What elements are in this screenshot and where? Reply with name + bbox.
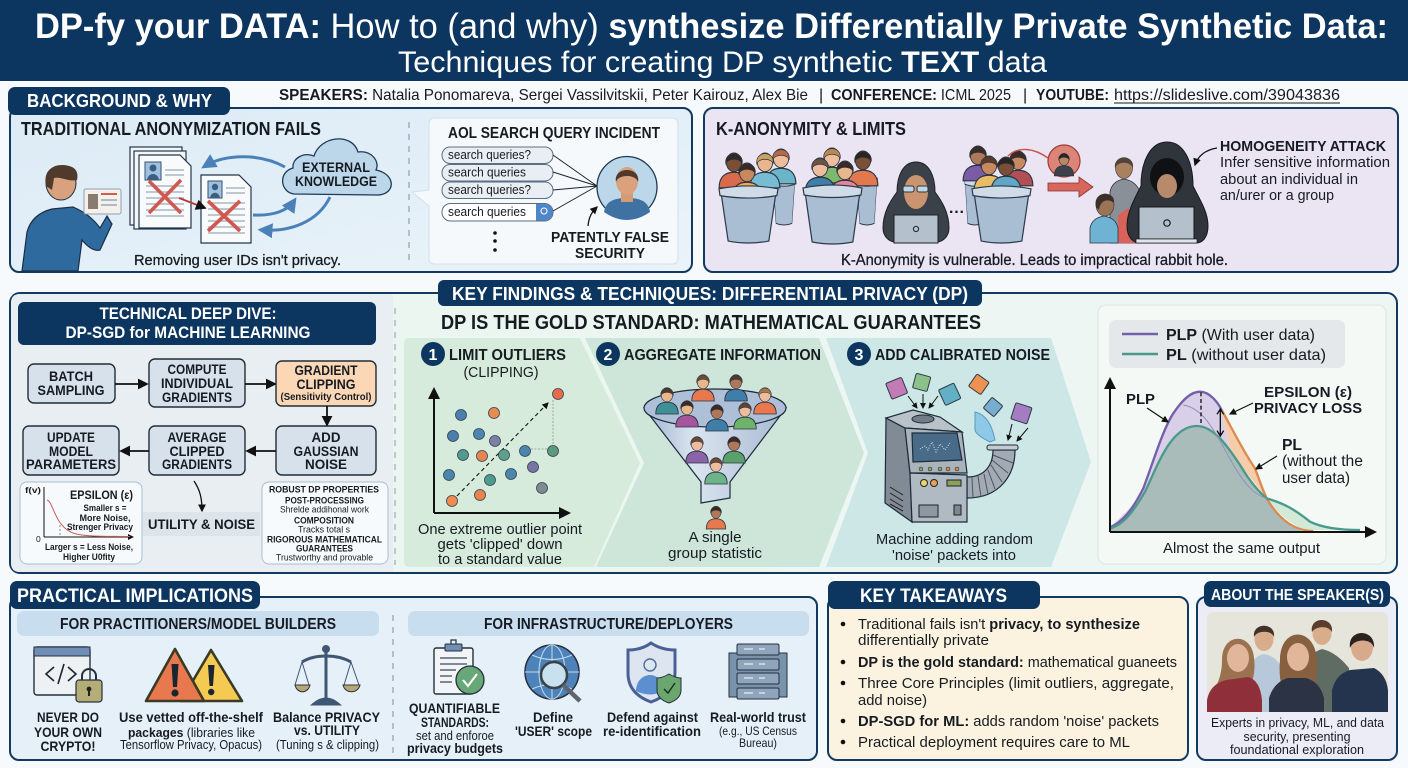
speakers line: | <box>819 87 823 104</box>
flow: compute individual gradients: GRADIENTS <box>162 390 232 405</box>
flow: gradient clipping: (Sensitivity Control) <box>280 392 372 403</box>
caption: experts: Experts in privacy, ML, and data <box>1211 715 1385 730</box>
heading: aggregate: AGGREGATE INFORMATION <box>624 347 821 364</box>
card: robust DP properties: Trustworthy and provable <box>276 552 373 562</box>
label: epsilon privacy loss: PRIVACY LOSS <box>1254 400 1362 417</box>
card: robust DP properties: Shrelde addihonal work <box>280 504 369 514</box>
chart card: PLP vs PL <box>1098 305 1386 564</box>
icon: balance scales <box>295 646 360 704</box>
heading: k-anonymity: K-ANONYMITY & LIMITS <box>716 119 906 139</box>
icon: second anonymized document <box>201 175 251 243</box>
heading: DP-SGD <box>18 302 376 345</box>
title banner: DP-fy your DATA: How to (and why) synthesize Differentially Private Synthetic Data: <box>35 7 1388 46</box>
speaker 3 <box>1269 634 1324 712</box>
search query pills: search queries? <box>448 148 531 162</box>
icon: hacker with glasses <box>883 162 949 243</box>
flow: average clipped gradients <box>149 426 245 475</box>
icon: code window with lock <box>34 647 102 702</box>
icon: noise packets <box>886 373 1032 424</box>
speaker 2 <box>1251 626 1282 712</box>
flow: average clipped gradients: AVERAGE <box>168 430 226 445</box>
arrow: to avatar <box>588 207 597 226</box>
caption: outlier clipped <box>418 521 583 568</box>
speaker 1 <box>1207 639 1262 712</box>
panel: practical implications <box>10 581 817 760</box>
arrow: link between records <box>179 198 205 208</box>
label: patently false security: PATENTLY FALSE <box>551 230 669 246</box>
label: PL <box>1282 437 1363 487</box>
caption: machine adding noise <box>876 531 1033 564</box>
text: quantifiable standards: set and enforoe <box>416 729 494 743</box>
arrow: cloud back to document <box>262 197 330 230</box>
caption: single group statistic: A single <box>688 529 742 546</box>
flow: update model parameters: UPDATE <box>47 430 95 445</box>
chevron 2: aggregate information <box>585 338 864 567</box>
badge 2 <box>596 342 620 366</box>
heading: add calibrated noise: ADD CALIBRATED NOISE <box>875 347 1050 364</box>
density curves <box>1110 392 1360 532</box>
badge 1: 1 <box>429 347 438 364</box>
caption: almost the same output: Almost the same output <box>1163 541 1320 557</box>
subheader: practitioners: FOR PRACTITIONERS/MODEL BUILDERS <box>60 616 336 633</box>
takeaways list: DP is the gold standard: mathematical guaneets <box>858 654 1177 671</box>
flow: gradient clipping <box>276 361 376 406</box>
card: epsilon chart: More Noise, <box>80 513 130 523</box>
search query pills: search queries <box>448 205 526 219</box>
card: robust DP properties: GUARANTEES <box>296 544 353 554</box>
text: real-world trust: (e.g., US Census <box>719 724 797 738</box>
text: never do your own crypto: NEVER DO <box>37 709 99 725</box>
flow: average clipped gradients: GRADIENTS <box>162 457 232 472</box>
text: real-world trust <box>710 709 806 750</box>
tab: about the speakers: ABOUT THE SPEAKER(S) <box>1211 587 1384 604</box>
heading: limit outliers: LIMIT OUTLIERS <box>449 347 566 364</box>
icon: funnel of people <box>644 375 786 503</box>
subheader: infrastructure <box>408 611 809 636</box>
speaker 4 <box>1308 620 1349 712</box>
label: epsilon privacy loss <box>1254 384 1362 417</box>
card: robust DP properties <box>262 482 388 564</box>
flow: gradient clipping: GRADIENT <box>294 363 358 378</box>
tab: about the speakers <box>1204 581 1390 607</box>
heading: DP-SGD: TECHNICAL DEEP DIVE: <box>100 305 276 323</box>
flow: add gaussian noise: GAUSSIAN <box>294 444 358 459</box>
text: real-world trust: Bureau) <box>739 736 777 750</box>
takeaways list: Practical deployment requires care to ML <box>858 734 1130 751</box>
title banner: Techniques for creating DP synthetic TEXT data <box>398 46 1047 79</box>
legend <box>1109 320 1345 368</box>
icon: bucket group one <box>719 149 796 243</box>
text: quantifiable standards: privacy budgets <box>407 741 503 756</box>
caption: single group statistic <box>668 529 763 562</box>
legend: PLP (With user data) <box>1166 327 1315 344</box>
card: robust DP properties: POST-PROCESSING <box>285 496 364 506</box>
heading: DP is the gold standard: DP IS THE GOLD STANDARD: MATHEMATICAL GUARANTEES <box>441 312 981 334</box>
caption: outlier clipped: to a standard value <box>438 551 562 568</box>
caption: experts: foundational exploration <box>1230 742 1364 757</box>
icon: noise machine <box>885 410 1018 522</box>
card: epsilon chart: Strenger Privacy <box>67 522 133 532</box>
title banner <box>0 0 1408 81</box>
card: epsilon chart: Smaller s = <box>84 503 126 513</box>
takeaways list: DP-SGD for ML: adds random 'noise' packets <box>858 713 1159 730</box>
badge 1 <box>421 342 445 366</box>
flow: add gaussian noise: NOISE <box>305 457 347 472</box>
card: robust DP properties: Tracks total s <box>298 524 350 534</box>
text: vetted packages <box>119 709 263 752</box>
icon: bucket group three <box>963 146 1033 243</box>
arrow: cloud to documents <box>205 157 285 167</box>
icon: group targeted by hacker <box>1090 158 1140 243</box>
label: epsilon privacy loss: EPSILON (ε) <box>1264 384 1352 401</box>
flow: batch sampling: BATCH <box>49 369 93 384</box>
text: never do your own crypto: YOUR OWN <box>34 724 102 740</box>
label: PL: PL <box>1282 437 1302 454</box>
text: vetted packages: Use vetted off-the-shelf <box>119 709 263 725</box>
axes <box>1110 379 1375 532</box>
card: robust DP properties: ROBUST DP PROPERTIES <box>269 484 379 496</box>
arrow: PLP <box>1147 408 1168 422</box>
search query pills: search queries <box>448 166 526 180</box>
chevron 1: limit outliers <box>404 338 640 568</box>
photo: five speakers <box>1207 612 1388 712</box>
flow: update model parameters <box>23 426 119 475</box>
label: PL: (without the <box>1282 453 1363 470</box>
arrow: epsilon <box>1230 403 1253 414</box>
icon: external knowledge cloud: KNOWLEDGE <box>295 174 377 189</box>
label: utility and noise <box>143 512 260 536</box>
icon: globe and magnifier <box>525 645 580 701</box>
arrow: document to cloud <box>253 201 294 215</box>
text: define user scope <box>515 709 592 739</box>
text: balance privacy vs utility: vs. UTILITY <box>294 722 361 738</box>
icon: external knowledge cloud <box>283 139 391 195</box>
panel: key takeaways <box>828 581 1188 760</box>
tab: background and why: BACKGROUND & WHY <box>27 91 212 111</box>
icon: server rack <box>729 644 787 699</box>
arrow: to utility and noise <box>194 481 202 511</box>
dots <box>493 231 497 252</box>
flow: update model parameters: MODEL <box>49 444 93 459</box>
dots: ... <box>949 200 964 217</box>
flow: compute individual gradients: INDIVIDUAL <box>161 376 233 391</box>
speakers line: YOUTUBE: <box>1036 87 1109 104</box>
takeaways list: Traditional fails isn't privacy, to synthesize <box>858 616 1140 633</box>
takeaways list: Three Core Principles (limit outliers, aggregate, <box>858 675 1174 692</box>
caption: removing user IDs: Removing user IDs isn't privacy. <box>134 252 341 269</box>
packet arrows <box>908 394 1028 441</box>
scatter plot <box>434 388 569 513</box>
panel: traditional anonymization <box>10 108 692 272</box>
homogeneity attack text: about an individual in <box>1220 172 1358 188</box>
heading: traditional anonymization fails: TRADITIONAL ANONYMIZATION FAILS <box>21 119 321 139</box>
homogeneity attack text: an/urer or a group <box>1220 188 1334 204</box>
caption: machine adding noise: 'noise' packets into <box>892 547 1016 564</box>
flow: batch sampling <box>28 364 115 403</box>
card: epsilon chart: 0 <box>36 534 41 544</box>
text: quantifiable standards: STANDARDS: <box>421 715 489 730</box>
icon: identified person <box>1048 145 1080 177</box>
caption: outlier clipped: gets 'clipped' down <box>438 536 562 553</box>
panel: k-anonymity and limits <box>704 108 1398 272</box>
heading: DP-SGD: DP-SGD for MACHINE LEARNING <box>66 324 310 342</box>
tab: key takeaways <box>828 581 1040 609</box>
icon: person holding ID <box>22 165 121 271</box>
card: epsilon chart <box>20 482 142 564</box>
flow: compute individual gradients <box>149 359 245 407</box>
badge 2: 2 <box>604 347 613 364</box>
text: quantifiable standards: QUANTIFIABLE <box>409 701 500 716</box>
takeaways list: differentially private <box>858 632 989 649</box>
caption: outlier clipped: One extreme outlier point <box>418 521 583 538</box>
icon: user avatar <box>597 156 657 220</box>
flow: add gaussian noise: ADD <box>312 430 341 445</box>
text: balance privacy vs utility: Balance PRIVACY <box>273 709 381 725</box>
tab: key findings: KEY FINDINGS & TECHNIQUES: DIFFERENTIAL PRIVACY (DP) <box>452 284 968 304</box>
text: define user scope: Define <box>533 709 573 725</box>
panel: technical deep dive <box>18 302 388 564</box>
homogeneity attack text <box>1220 138 1390 204</box>
subheader: practitioners <box>17 611 379 636</box>
card: AOL search query incident: SECURITY <box>575 246 645 262</box>
speakers line: | <box>1023 87 1027 104</box>
text: defend re-identification: Defend against <box>607 709 698 725</box>
flow: update model parameters: PARAMETERS <box>26 457 116 472</box>
search query pills <box>442 147 553 221</box>
text: balance privacy vs utility <box>273 709 381 752</box>
caption: experts <box>1211 715 1385 757</box>
arrow: PL <box>1256 456 1277 469</box>
flow: batch sampling: SAMPLING <box>38 383 104 398</box>
text: balance privacy vs utility: (Tuning s & clipping) <box>276 738 379 752</box>
flow: gradient clipping: CLIPPING <box>296 377 356 392</box>
caption: machine adding noise: Machine adding random <box>876 531 1033 548</box>
label: utility and noise: UTILITY & NOISE <box>148 516 255 532</box>
icon: warning triangles <box>146 649 242 701</box>
text: vetted packages: packages (libraries like <box>128 725 255 740</box>
text: quantifiable standards <box>407 701 503 756</box>
homogeneity attack text: Infer sensitive information <box>1220 155 1390 171</box>
subheading: clipping: (CLIPPING) <box>464 365 538 381</box>
card: epsilon chart: Larger s = Less Noise, <box>45 542 133 552</box>
speakers line: https://slideslive.com/39043836 <box>1114 87 1340 104</box>
tab: key takeaways: KEY TAKEAWAYS <box>860 585 1007 607</box>
panel: about the speakers <box>1197 581 1397 760</box>
icon: bucket group two <box>803 148 878 244</box>
text: real-world trust: Real-world trust <box>710 709 806 725</box>
card: robust DP properties: RIGOROUS MATHEMATICAL <box>267 534 382 546</box>
search query pills: search queries? <box>448 183 531 197</box>
subheader: infrastructure: FOR INFRASTRUCTURE/DEPLOYERS <box>484 616 733 633</box>
takeaways list: add noise) <box>858 692 927 709</box>
badge 3 <box>847 342 871 366</box>
card: robust DP properties: COMPOSITION <box>294 516 354 526</box>
speakers line: CONFERENCE: ICML 2025 <box>831 87 1011 104</box>
label: PLP: PLP <box>1126 391 1155 408</box>
card: AOL search query incident <box>412 118 678 264</box>
icon: shield with person <box>628 643 681 703</box>
panel: key findings container <box>10 293 1397 573</box>
caption: experts: security, presenting <box>1244 729 1350 744</box>
text: never do your own crypto <box>34 709 102 754</box>
flow arrows <box>115 384 327 451</box>
text: never do your own crypto: CRYPTO! <box>40 738 96 754</box>
speakers line: SPEAKERS: Natalia Ponomareva, Sergei Vassilvitskii, Peter Kairouz, Alex Bie <box>279 87 808 104</box>
tab: background and why <box>8 87 230 115</box>
arrow: red <box>1048 177 1093 197</box>
speakers line <box>279 87 1340 104</box>
link: curved red line <box>1008 149 1048 158</box>
card: epsilon chart: f(v) <box>25 485 41 495</box>
text: define user scope: 'USER' scope <box>515 723 592 739</box>
tab: practical implications: PRACTICAL IMPLICATIONS <box>17 585 253 607</box>
card: epsilon chart: EPSILON (ε) <box>70 488 133 502</box>
label: PL: user data) <box>1282 470 1350 487</box>
caption: single group statistic: group statistic <box>668 545 763 562</box>
chevron 3: add calibrated noise <box>826 338 1091 567</box>
text: defend re-identification <box>603 709 701 739</box>
homogeneity attack text: HOMOGENEITY ATTACK <box>1220 138 1386 155</box>
flow: compute individual gradients: COMPUTE <box>168 362 226 377</box>
icon: anonymized document stack <box>130 147 191 229</box>
heading: AOL: AOL SEARCH QUERY INCIDENT <box>448 125 660 142</box>
legend: PL (without user data) <box>1166 347 1326 364</box>
flow: average clipped gradients: CLIPPED <box>170 444 225 459</box>
icon: clipboard check <box>434 640 484 694</box>
flow: add gaussian noise <box>276 426 376 475</box>
text: defend re-identification: re-identification <box>603 723 701 739</box>
icon: hooded attacker <box>1127 142 1208 243</box>
text: vetted packages: Tensorflow Privacy, Opacus) <box>120 738 262 752</box>
icon: external knowledge cloud: EXTERNAL <box>302 160 370 175</box>
icon: single output person <box>706 506 726 529</box>
takeaways list <box>841 616 1177 751</box>
badge 3: 3 <box>855 347 864 364</box>
caption: k-anonymity vulnerable: K-Anonymity is vulnerable. Leads to impractical rabbit hole. <box>841 252 1228 269</box>
links to user <box>553 155 597 211</box>
speaker 5 <box>1332 633 1388 712</box>
arrow: to attacker <box>1195 148 1217 165</box>
card: epsilon chart: Higher U0fity <box>63 552 115 562</box>
